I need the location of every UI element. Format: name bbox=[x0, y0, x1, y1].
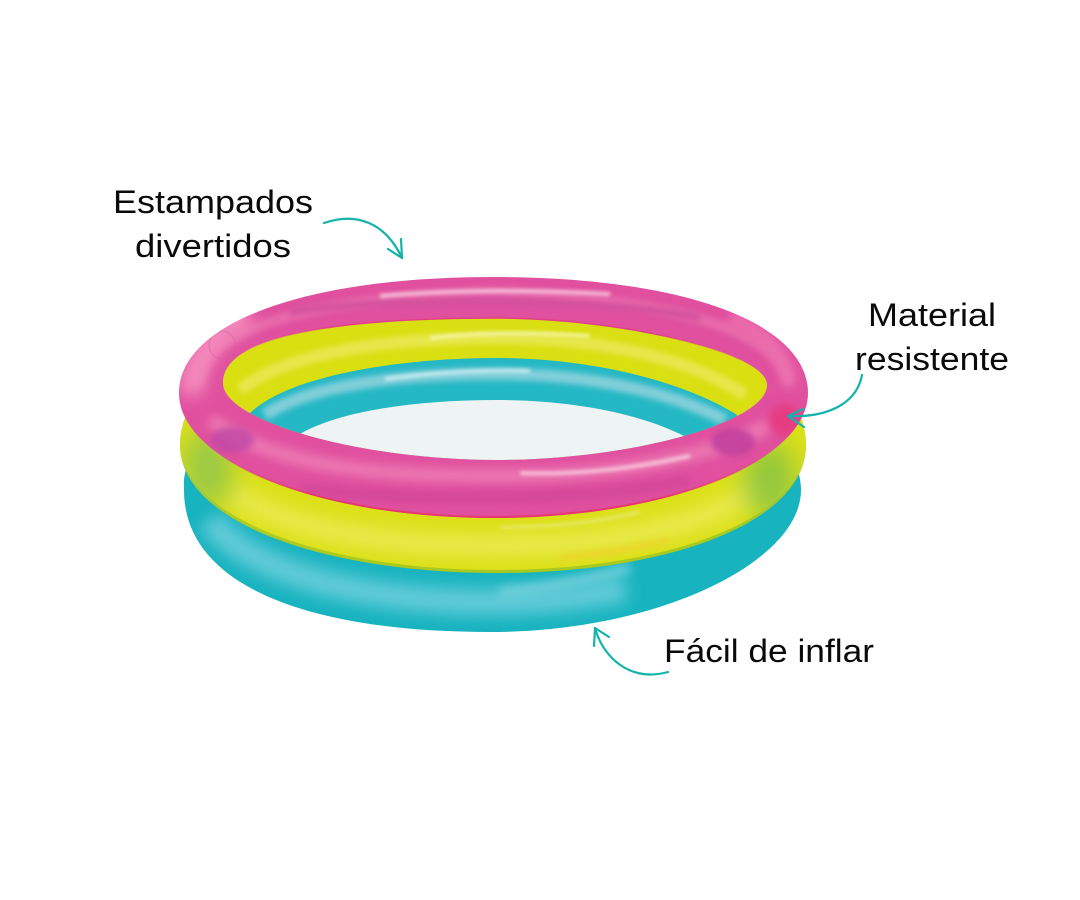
teal inner band bbox=[250, 358, 737, 470]
callout: Estampados divertidos bbox=[113, 184, 402, 264]
callout: Fácil de inflar bbox=[594, 628, 874, 674]
pool interior bbox=[223, 318, 767, 460]
callout: Material resistente bbox=[788, 297, 1009, 427]
translucent valve patches bbox=[210, 427, 254, 453]
label: divertidos bbox=[135, 228, 291, 264]
pink top ring bbox=[179, 277, 808, 518]
label bbox=[855, 297, 1009, 377]
label: Fácil de inflar bbox=[664, 633, 874, 669]
teal lower ring bbox=[184, 470, 801, 632]
highlights on tube bbox=[380, 291, 610, 296]
yellow middle ring bbox=[178, 410, 808, 573]
red seam under pink ring bbox=[179, 393, 808, 517]
arrow bbox=[594, 628, 668, 674]
seam at inner edge bbox=[223, 318, 767, 385]
label: Material bbox=[868, 297, 996, 333]
illustration: inflatable three-ring pool bbox=[178, 277, 808, 632]
label: resistente bbox=[855, 341, 1009, 377]
label: Estampados bbox=[113, 184, 313, 220]
pool floor bbox=[300, 400, 684, 460]
label bbox=[113, 184, 313, 264]
arrow bbox=[324, 219, 402, 258]
arrow bbox=[788, 375, 862, 427]
